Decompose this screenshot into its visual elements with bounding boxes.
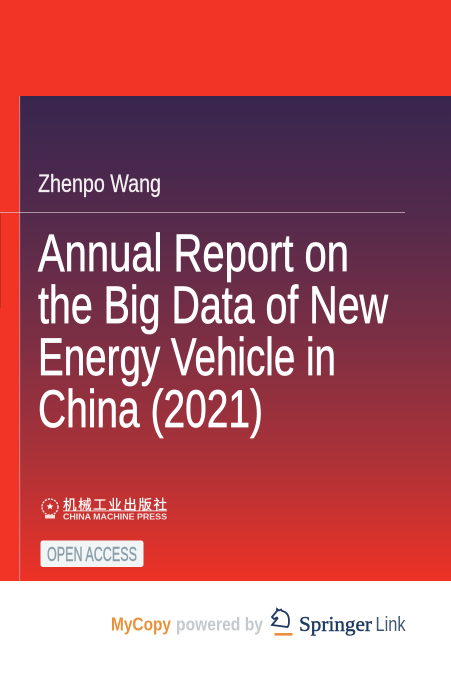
- footer: MyCopy powered by Springer Link: [111, 609, 406, 636]
- Link wordmark: Link: [376, 614, 406, 636]
- title: Annual Report on: [38, 224, 349, 283]
- open access badge: OPEN ACCESS: [47, 544, 137, 566]
- publisher rule: [63, 510, 167, 512]
- horizontal rule under author: [0, 212, 405, 213]
- publisher English name: CHINA MACHINE PRESS: [63, 512, 168, 522]
- author name: Zhenpo Wang: [38, 170, 161, 198]
- title: China (2021): [38, 380, 263, 439]
- Springer wordmark: Springer: [299, 612, 372, 636]
- title: Energy Vehicle in: [38, 328, 336, 387]
- gradient cover panel: [20, 96, 451, 581]
- left edge accent: [0, 213, 1, 308]
- publisher Chinese name: 机械工业出版社: [63, 498, 167, 512]
- title: [38, 224, 389, 439]
- publisher logo: China Machine Press: [42, 498, 168, 522]
- powered by label: powered by: [176, 614, 264, 634]
- MyCopy label: MyCopy: [111, 614, 172, 634]
- icon: gear emblem: [42, 499, 58, 518]
- icon: Springer horse: [272, 609, 292, 636]
- left vertical rule: [19, 96, 20, 581]
- open access badge: [40, 540, 144, 567]
